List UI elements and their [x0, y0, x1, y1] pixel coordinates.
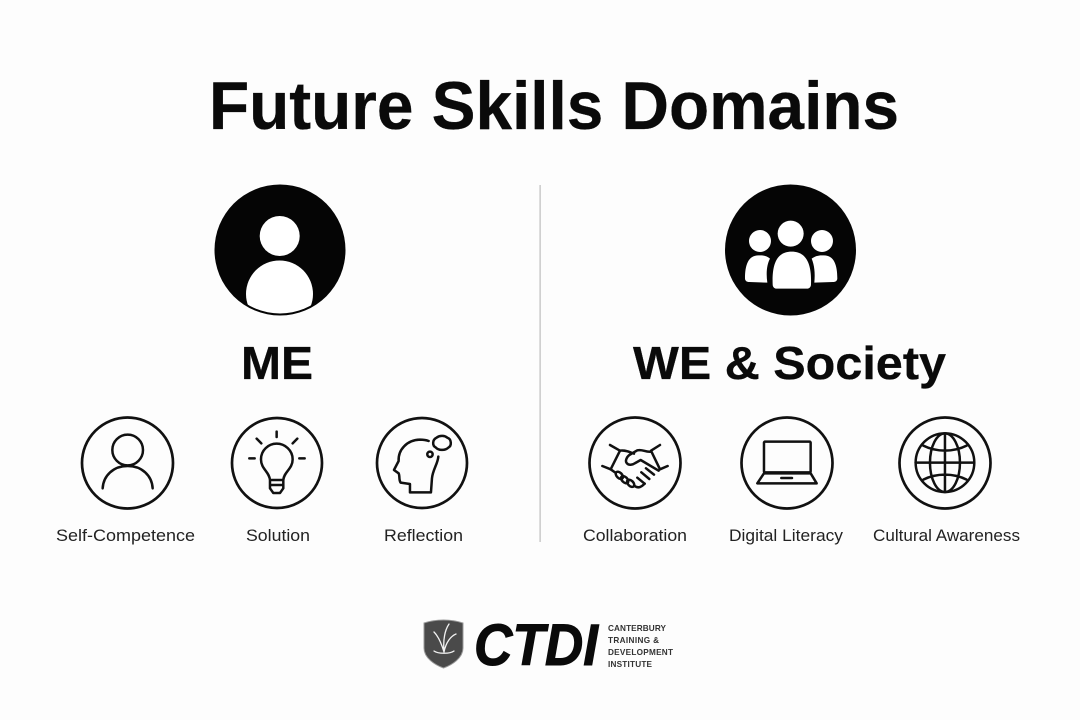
skill: Reflection: Reflection [384, 526, 463, 545]
skill: Solution [232, 418, 322, 545]
skill: Reflection [377, 418, 467, 545]
heading: ME: ME [241, 337, 313, 389]
organisation name: DEVELOPMENT [608, 648, 673, 657]
logo: CTDI [424, 613, 673, 678]
skill: Self-Competence: Self-Competence [56, 526, 195, 545]
organisation name: INSTITUTE [608, 660, 653, 669]
skill: Collaboration [583, 418, 687, 545]
panel: ME [56, 184, 467, 545]
skill: Digital Literacy [729, 418, 843, 545]
heading: WE & Society: WE & Society [633, 337, 946, 389]
skill: Collaboration: Collaboration [583, 526, 687, 545]
organisation name: TRAINING & [608, 636, 659, 645]
icon: single person badge [214, 184, 346, 328]
skill: Digital Literacy: Digital Literacy [729, 526, 843, 545]
organisation name: CANTERBURY [608, 624, 667, 633]
skill: Solution: Solution [246, 526, 310, 545]
icon: shield [424, 620, 463, 668]
panel: WE and Society [583, 184, 1020, 545]
title: Future Skills Domains [209, 68, 899, 144]
wordmark: CTDI [474, 613, 600, 678]
icon: group badge [725, 184, 856, 316]
skill: Cultural Awareness [873, 418, 1020, 545]
skill: Cultural Awareness: Cultural Awareness [873, 526, 1020, 545]
organisation name [608, 624, 673, 669]
skill: Self-Competence [56, 418, 195, 545]
